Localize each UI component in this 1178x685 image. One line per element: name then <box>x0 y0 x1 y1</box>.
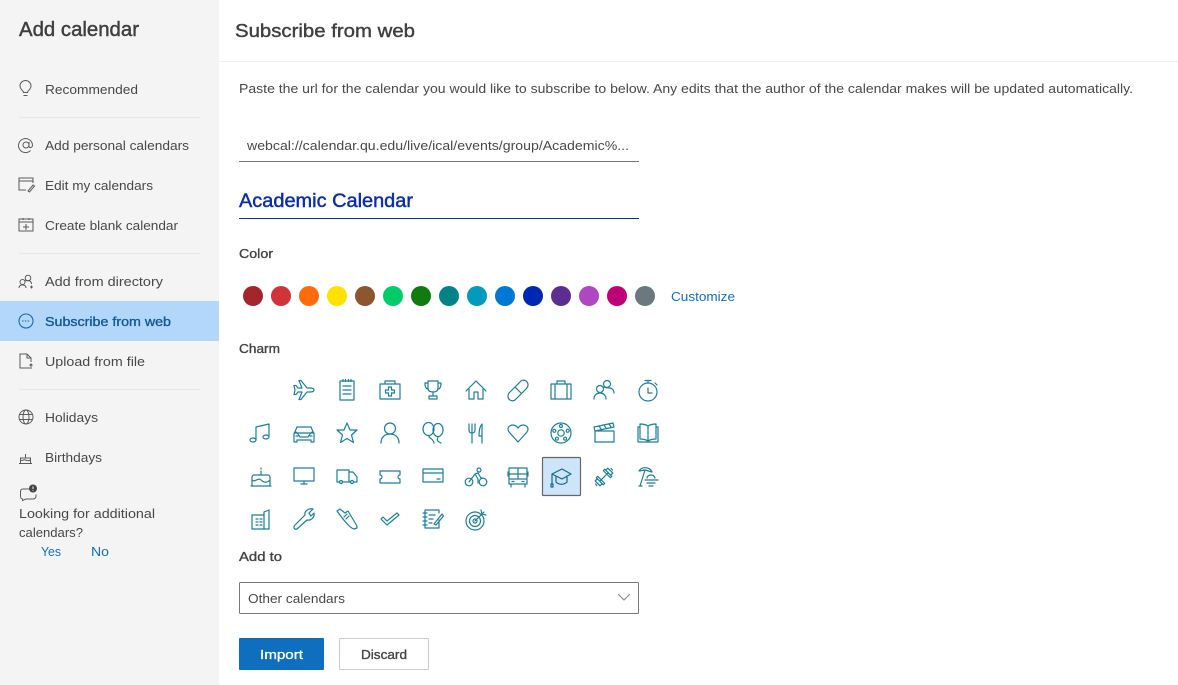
charm grid <box>250 380 658 530</box>
icon: office buildings <box>252 510 269 529</box>
feedback question: Looking for additional <box>19 506 155 521</box>
icon: sneaker <box>337 509 357 529</box>
icon: star <box>337 423 357 442</box>
icon: balloons <box>423 422 443 443</box>
page heading: Subscribe from web: Subscribe from web <box>235 21 415 41</box>
icon: heart <box>508 425 528 442</box>
color swatches <box>243 286 655 306</box>
button: Discard <box>340 638 428 670</box>
button: Import <box>239 638 324 670</box>
nav item: Add personal calendars: Add personal calendars <box>45 138 190 153</box>
nav item selected: Subscribe from web <box>0 301 219 341</box>
icon: beach umbrella <box>639 468 658 486</box>
icon: soccer ball <box>551 423 571 443</box>
nav item: Edit my calendars: Edit my calendars <box>45 178 154 193</box>
nav item: Upload from file: Upload from file <box>45 354 145 369</box>
link: No: No <box>91 544 109 559</box>
instructions: Paste the url for the calendar you would like to subscribe to below. Any edits that the author of the calendar makes will be updated automatically. <box>239 81 1133 96</box>
icon: briefcase <box>551 381 571 399</box>
selected charm highlight <box>542 458 580 496</box>
icon: credit card <box>423 469 443 482</box>
icon: bus <box>508 468 528 487</box>
nav item: Recommended <box>20 80 138 97</box>
icon: truck <box>337 470 357 484</box>
label: Color: Color <box>239 246 274 261</box>
icon: cutlery <box>469 424 482 443</box>
nav item: Add from directory: Add from directory <box>45 274 164 289</box>
icon: dumbbell <box>593 466 615 488</box>
icon: wrench <box>294 509 314 529</box>
icon: people <box>594 380 614 399</box>
panel: sidebar <box>0 0 219 685</box>
url input: webcal://calendar.qu.edu/live/ical/events/group/Academic%... <box>246 138 629 153</box>
nav item: Holidays: Holidays <box>45 410 99 425</box>
nav item: Holidays <box>19 410 99 425</box>
icon: monitor <box>294 468 314 484</box>
icon: house <box>466 381 486 399</box>
icon: stopwatch <box>639 380 657 401</box>
icon: ticket <box>380 471 400 483</box>
feedback question: calendars? <box>19 525 83 540</box>
calendar name input: Academic Calendar <box>239 191 414 212</box>
icon: airplane <box>294 380 314 400</box>
label: Charm: Charm <box>239 341 280 356</box>
icon: person <box>381 423 399 443</box>
dropdown: Other calendars <box>240 582 638 614</box>
icon: medical kit <box>380 381 400 399</box>
icon: car <box>294 427 314 442</box>
icon: clapperboard <box>594 423 614 442</box>
link: Customize: Customize <box>671 289 735 304</box>
link: Yes: Yes <box>41 544 61 559</box>
nav item selected: Subscribe from web: Subscribe from web <box>45 314 171 329</box>
icon: trophy <box>425 381 441 399</box>
label: Add to: Add to <box>239 549 282 564</box>
nav item: Create blank calendar: Create blank calendar <box>45 218 179 233</box>
heading: Add calendar: Add calendar <box>19 19 139 41</box>
icon: notepad <box>340 380 354 400</box>
icon: cyclist <box>465 468 487 486</box>
button: Import: Import <box>260 647 303 662</box>
icon: target <box>466 510 486 530</box>
nav item: Birthdays <box>19 450 103 465</box>
icon: graduation cap <box>551 469 571 487</box>
icon: bandage <box>508 380 528 401</box>
icon: feedback bubble <box>20 484 37 500</box>
icon: birthday cake <box>251 468 271 486</box>
nav item: Recommended: Recommended <box>45 82 138 97</box>
icon: music notes <box>250 424 269 442</box>
dropdown: Other calendars: Other calendars <box>248 591 346 606</box>
icon: open book <box>638 424 658 442</box>
icon: check mark <box>381 513 399 525</box>
feedback question <box>19 506 155 540</box>
button: Discard: Discard <box>361 647 407 662</box>
nav item: Birthdays: Birthdays <box>45 450 103 465</box>
icon: notes with pen <box>423 510 444 528</box>
